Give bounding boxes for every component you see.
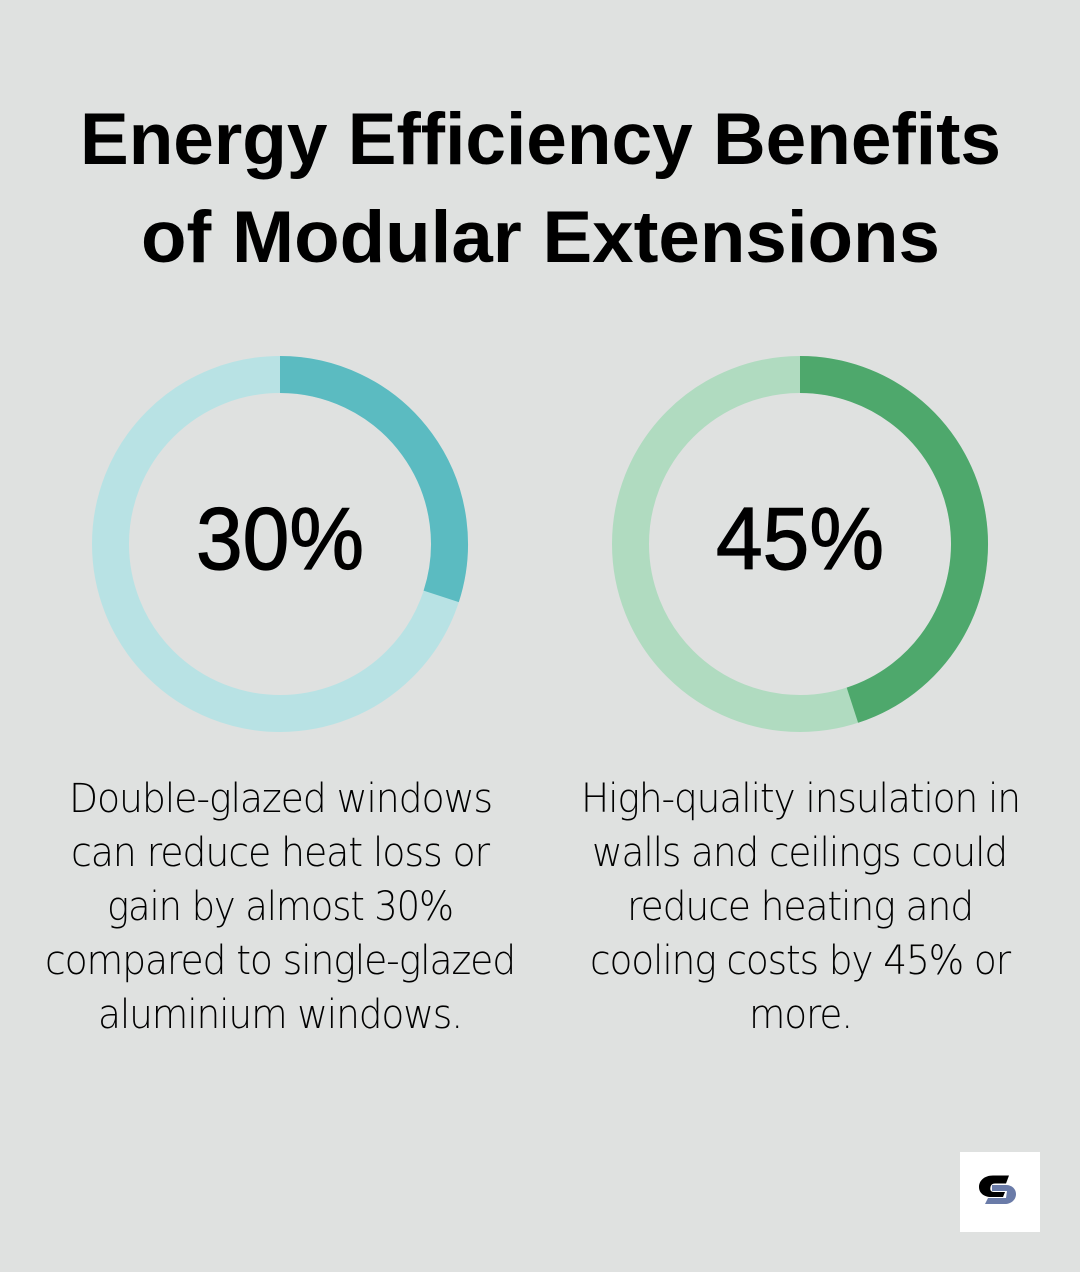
text block: insulation: reduce heating and bbox=[627, 884, 973, 930]
text block: insulation: cooling costs by 45% or bbox=[590, 938, 1012, 984]
text block: double-glazed windows: gain by almost 30% bbox=[107, 884, 453, 930]
title: of Modular Extensions bbox=[141, 197, 940, 278]
text block: insulation: walls and ceilings could bbox=[592, 830, 1007, 876]
title: Energy Efficiency Benefits bbox=[80, 99, 1001, 180]
text block: double-glazed windows: compared to single-glazed bbox=[45, 938, 515, 984]
donut chart: 45% bbox=[630, 374, 970, 714]
value: 45%: 45% bbox=[716, 489, 884, 588]
value: 30%: 30% bbox=[196, 489, 364, 588]
title bbox=[80, 99, 1001, 278]
text block: insulation: more. bbox=[749, 992, 852, 1038]
text block: double-glazed windows bbox=[45, 776, 515, 1038]
text block: double-glazed windows: Double-glazed windows bbox=[69, 776, 492, 822]
text block: double-glazed windows: aluminium windows. bbox=[98, 992, 462, 1038]
text block: double-glazed windows: can reduce heat loss or bbox=[71, 830, 491, 876]
logo badge bbox=[960, 1152, 1040, 1232]
text block: insulation: High-quality insulation in bbox=[581, 776, 1020, 822]
text block: insulation bbox=[581, 776, 1020, 1038]
donut chart: 30% bbox=[110, 374, 450, 714]
